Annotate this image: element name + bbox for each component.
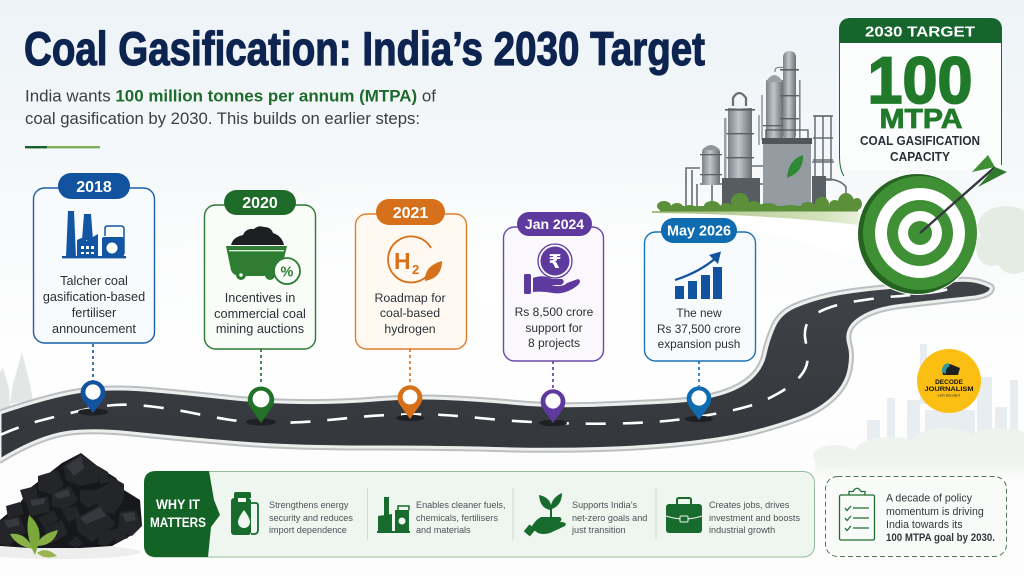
2030 target callout: CAPACITY: [890, 149, 950, 164]
panel: conclusion note: [826, 476, 1006, 556]
card text: expansion push: [658, 337, 740, 351]
card text: gasification-based: [43, 290, 145, 304]
milestone card: 2020: [204, 190, 316, 349]
icon: hand with sprout: [524, 493, 566, 536]
milestone card: 2020: 2020: [242, 195, 278, 212]
benefit text: cleaner fuels: Enables cleaner fuels,: [416, 500, 505, 510]
plant: small column: [700, 145, 722, 185]
note text: [886, 492, 995, 544]
intro text: coal gasification by 2030. This builds on earlier steps:: [25, 110, 420, 128]
plant: left column: [724, 93, 755, 182]
arrow: [920, 155, 1007, 233]
benefit text: jobs: industrial growth: [709, 525, 775, 535]
card text: [43, 274, 145, 336]
benefit text: energy security: Strengthens energy: [269, 500, 349, 510]
icon: hydrogen with leaf: H: [394, 248, 411, 274]
brand logo: Let's Decode it: [938, 394, 960, 398]
card text: Roadmap for: [374, 291, 446, 305]
leaves: [10, 515, 58, 557]
icon: hydrogen with leaf: [388, 236, 442, 282]
benefit text: net zero: just transition: [571, 525, 626, 535]
icon: coal wagon with percent: %: [281, 264, 294, 280]
2030 target callout: 100: [868, 43, 972, 117]
coal pile with leaves: [0, 453, 142, 559]
target with arrow: [857, 155, 1007, 295]
2030 target callout: MTPA: [880, 103, 962, 134]
intro text: India wants 100 million tonnes per annum (MTPA) of: [25, 88, 436, 106]
card text: fertiliser: [72, 306, 117, 320]
milestone card: Jan 2024: Jan 2024: [525, 216, 584, 232]
connector and pin: 2018: [78, 344, 108, 416]
brand logo: DECODE: [935, 379, 964, 386]
note text: A decade of policy: [886, 492, 973, 504]
panel: why it matters: [144, 471, 814, 557]
card text: 8 projects: [528, 336, 580, 350]
card text: hydrogen: [384, 322, 436, 336]
benefit text: cleaner fuels: [416, 500, 505, 535]
milestone card: 2018: [34, 173, 154, 343]
plant: column two: [759, 67, 785, 145]
plant: tall column: [780, 51, 801, 141]
note text: momentum is driving: [886, 506, 984, 518]
card text: [515, 305, 594, 350]
note text: 100 MTPA goal by 2030.: [886, 532, 995, 544]
milestone card: May 2026: [644, 218, 756, 361]
plant: shrubs: [657, 193, 862, 212]
card text: Rs 8,500 crore: [515, 305, 594, 319]
brand logo: JOURNALISM: [924, 386, 974, 393]
benefit text: energy security: import dependence: [269, 525, 347, 535]
icon: rupee over hand: [524, 244, 580, 294]
faded trees right: [976, 206, 1024, 274]
card text: Talcher coal: [60, 274, 128, 288]
2030 target callout: [839, 18, 1002, 176]
plant: pipework: [686, 162, 846, 207]
card text: announcement: [52, 322, 136, 336]
icon: coal wagon with percent: [226, 226, 300, 284]
card text: [657, 306, 741, 351]
2030 target callout: COAL GASIFICATION: [860, 133, 980, 148]
icon: clipboard checklist: [840, 488, 874, 540]
note text: India towards its: [886, 519, 963, 531]
benefit text: jobs: [709, 500, 800, 535]
milestone card: 2021: [356, 199, 466, 349]
plant: block with leaf: [762, 130, 812, 206]
icon: rising bar chart: [675, 252, 722, 299]
faded city skyline: [813, 344, 1024, 480]
plant: base equipment: [722, 178, 760, 206]
card text: [214, 291, 306, 336]
milestone card: Jan 2024: [504, 212, 604, 361]
panel tab: why it matters label: [144, 471, 220, 557]
card text: Rs 37,500 crore: [657, 322, 741, 336]
benefit text: net zero: Supports India’s: [572, 500, 637, 510]
milestone card: 2018: 2018: [76, 179, 112, 196]
card text: commercial coal: [214, 307, 306, 321]
faded trees left: [0, 352, 33, 412]
connector and pin: 2021: [396, 349, 424, 421]
ground hill with grass: [652, 211, 876, 262]
connector and pin: May 2026: [685, 361, 713, 422]
benefit text: net zero: [571, 500, 647, 535]
icon: fuel can: [231, 492, 258, 535]
connector and pin: 2020: [246, 349, 276, 426]
panel tab: why it matters label: MATTERS: [150, 515, 206, 530]
icon: briefcase: [666, 498, 702, 533]
brand logo: [917, 349, 981, 413]
intro underline: [25, 146, 100, 148]
connector and pin: Jan 2024: [539, 361, 567, 426]
card text: [374, 291, 446, 336]
milestone card: May 2026: May 2026: [667, 224, 731, 240]
card text: mining auctions: [216, 322, 304, 336]
title: Coal Gasification: India’s 2030 Target: [24, 22, 705, 75]
card text: support for: [525, 321, 583, 335]
2030 target callout: 2030 TARGET: [865, 24, 975, 40]
panel tab: why it matters label: WHY IT: [156, 497, 201, 512]
road: [0, 280, 991, 460]
icon: hydrogen with leaf: 2: [412, 262, 419, 277]
icon: rupee over hand: ₹: [548, 251, 562, 273]
plant: scaffold tower: [813, 116, 833, 180]
benefit text: energy security: security and reduces: [269, 513, 353, 523]
card text: coal-based: [380, 306, 440, 320]
icon: green factory: [377, 497, 410, 533]
milestone card: 2021: 2021: [393, 205, 428, 222]
benefit text: cleaner fuels: chemicals, fertilisers: [416, 513, 498, 523]
card text: Incentives in: [225, 291, 295, 305]
icon: factory: [62, 211, 126, 258]
benefit text: net zero: net-zero goals and: [572, 513, 647, 523]
benefit text: jobs: investment and boosts: [709, 513, 800, 523]
intro text: [25, 88, 436, 128]
card text: The new: [676, 306, 722, 320]
benefit text: cleaner fuels: and materials: [416, 525, 471, 535]
benefit text: jobs: Creates jobs, drives: [709, 500, 790, 510]
gasification plant illustration: [657, 51, 862, 212]
benefit text: energy security: [269, 500, 353, 535]
